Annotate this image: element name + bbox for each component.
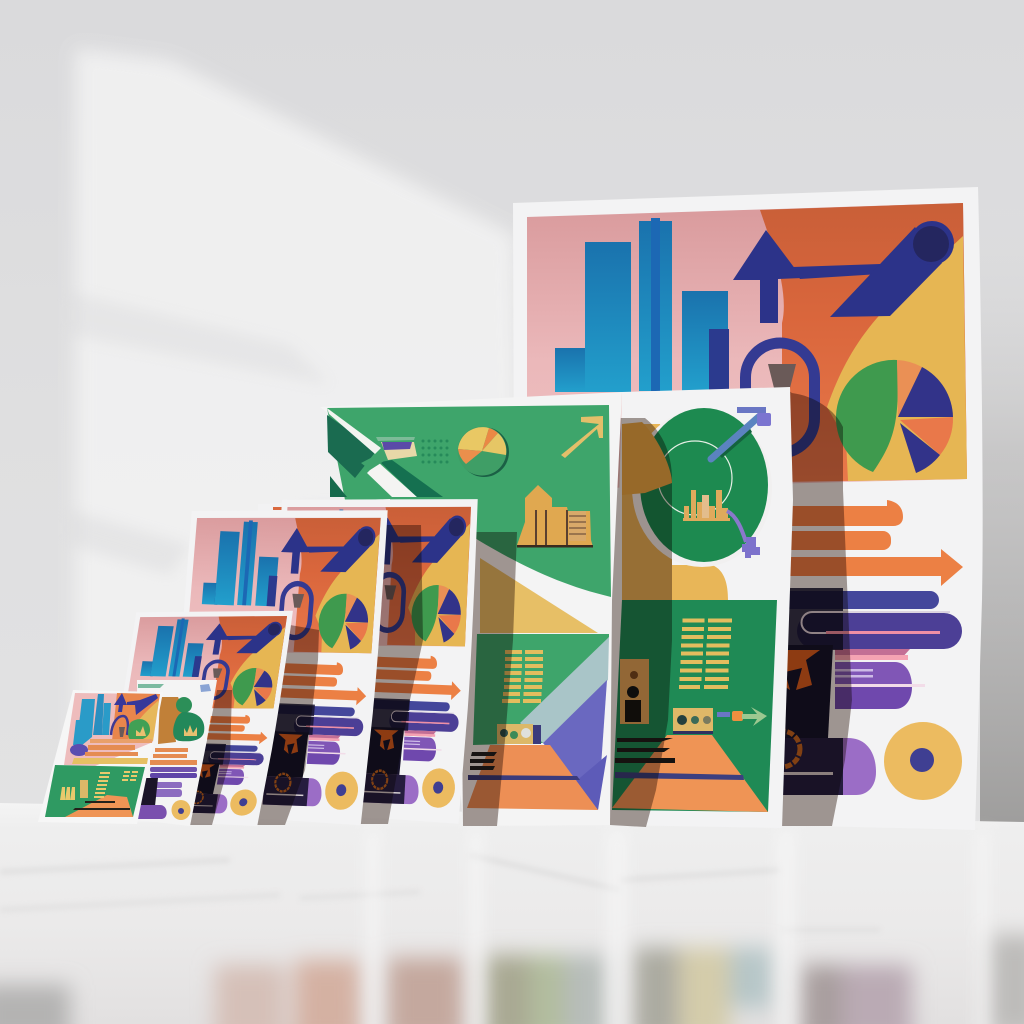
yellow table rows <box>679 618 732 689</box>
poster 3: green circle <box>610 387 793 828</box>
icon: building <box>517 485 593 548</box>
icon: yellow arrow <box>561 416 603 458</box>
mini table rows <box>60 771 138 800</box>
icon: speaker cabinet <box>620 659 649 724</box>
icon: skyline <box>683 490 730 521</box>
shadow on poster 4 <box>355 525 423 824</box>
poster 1: largest <box>513 187 983 830</box>
shadow on poster 3 <box>610 418 672 827</box>
icon: arrow up right <box>711 407 771 459</box>
poster 4 <box>258 492 480 824</box>
icon: open book <box>361 437 417 470</box>
floor with reflections <box>0 803 1024 1024</box>
icon: small pie <box>458 426 509 477</box>
poster 7 <box>137 680 217 826</box>
poster 8: smallest <box>38 690 163 824</box>
poster 2: green with building <box>320 392 622 826</box>
diagonal bands <box>327 408 443 497</box>
mini bars <box>73 694 111 750</box>
icon: console box <box>497 724 541 744</box>
poster 6 <box>102 607 294 826</box>
shadow on poster 6 <box>190 690 232 825</box>
shadow on poster 2 <box>460 532 517 826</box>
icon: console box <box>673 708 713 734</box>
dot grid <box>422 440 448 464</box>
shadow on poster 5 <box>255 625 319 825</box>
shadow on poster 1 <box>782 388 852 826</box>
poster 5 <box>167 503 390 825</box>
icon: green arrow <box>717 707 767 726</box>
yellow table rows <box>502 650 543 703</box>
reflection: white poster edges <box>365 830 989 1024</box>
reflection: colored poster tones <box>0 935 1024 1024</box>
icon: purple connector <box>727 511 760 558</box>
